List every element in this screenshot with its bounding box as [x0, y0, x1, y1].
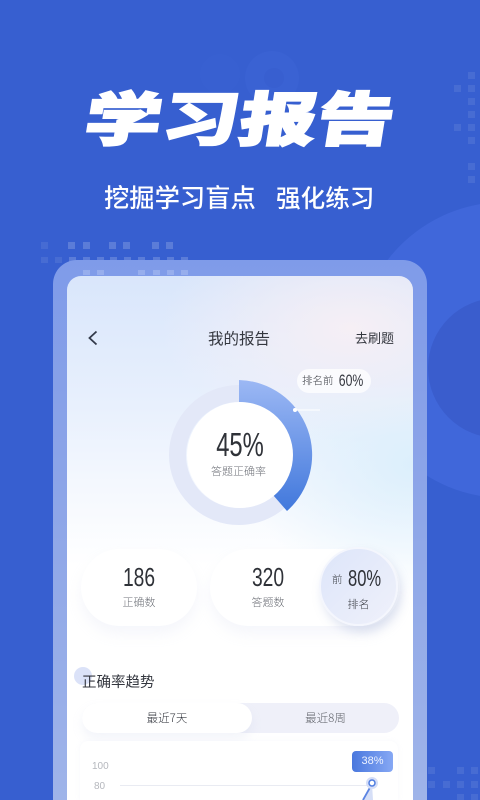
callout dot	[293, 408, 297, 412]
axis label 80: 80	[94, 781, 106, 792]
donut value: 45%	[216, 426, 264, 463]
title: 学习报告	[79, 73, 403, 158]
callout value: 60%	[339, 371, 363, 390]
subtitle: 挖掘学习盲点	[104, 179, 256, 215]
callout pill	[297, 369, 371, 393]
correct label: 正确数	[122, 594, 156, 610]
section heading: 正确率趋势	[82, 671, 154, 692]
callout label: 排名前	[302, 373, 334, 388]
active tab	[82, 703, 252, 733]
axis label 100: 100	[92, 761, 109, 772]
panel: report card	[67, 276, 413, 800]
inner white circle	[187, 402, 293, 508]
value tag: 38%	[361, 755, 384, 767]
stat: answered count	[210, 549, 400, 626]
header action: 去刷题	[355, 328, 394, 347]
section dot icon	[74, 667, 92, 685]
callout connector	[295, 409, 320, 411]
active tab: 最近7天	[147, 710, 187, 726]
subtitle: 强化练习	[276, 179, 374, 215]
ranking prefix: 前	[332, 572, 342, 587]
tab bar	[82, 703, 399, 733]
chart panel	[80, 741, 398, 800]
stat: correct count	[81, 549, 197, 626]
header title: 我的报告	[208, 327, 270, 349]
value tag	[352, 751, 393, 772]
correct number: 186	[123, 562, 155, 592]
progress arc	[239, 380, 312, 511]
area and line	[362, 777, 378, 800]
back arrow icon	[88, 330, 98, 346]
subtitle	[104, 179, 374, 215]
inactive tab: 最近8周	[305, 710, 346, 726]
ranking label: 排名	[348, 596, 370, 612]
ranking value: 80%	[348, 565, 381, 591]
answered label: 答题数	[252, 594, 284, 610]
tick ring	[178, 394, 300, 516]
stat: ranking badge	[319, 547, 398, 626]
answered number: 320	[252, 562, 284, 592]
phone frame	[53, 260, 427, 800]
donut label: 答题正确率	[211, 463, 266, 479]
